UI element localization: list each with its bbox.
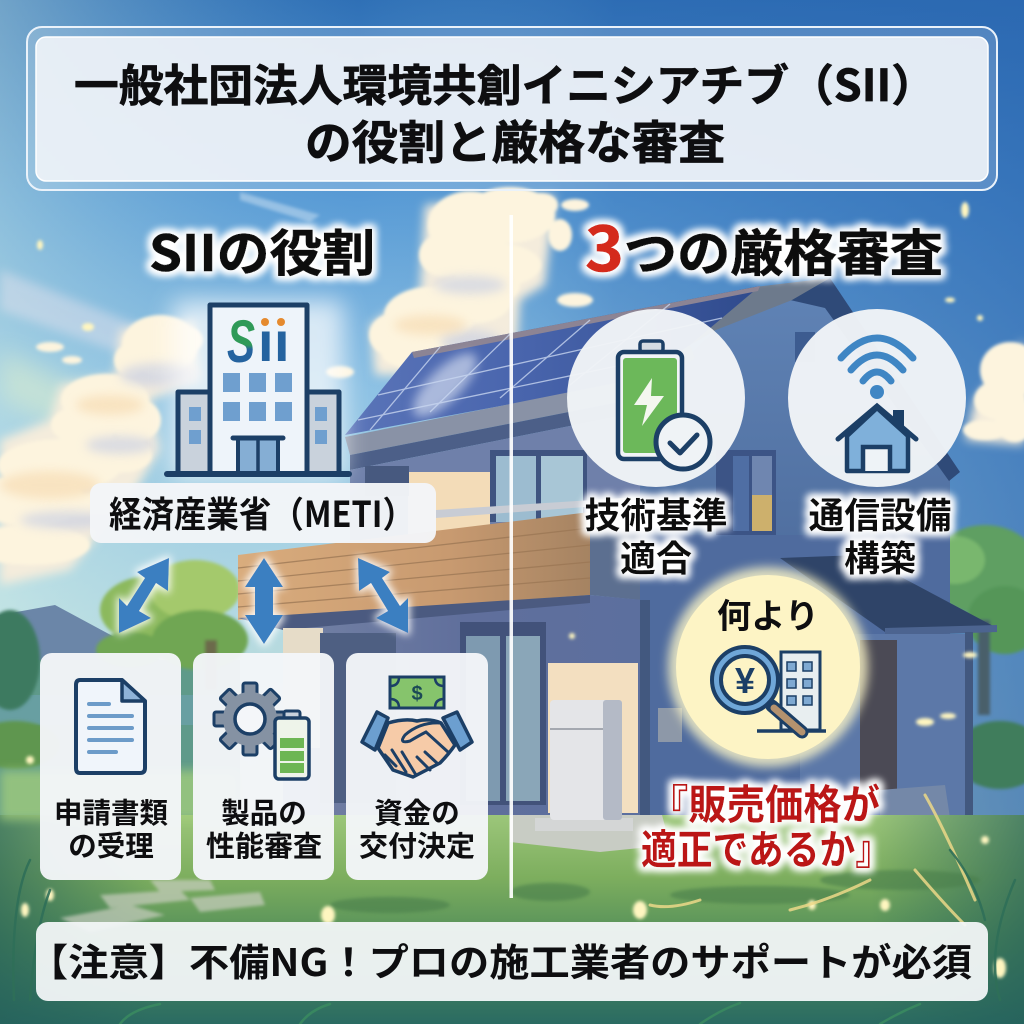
divider bbox=[510, 215, 513, 898]
footer warning panel bbox=[28, 922, 988, 1001]
red callout text: 適正であるか』 bbox=[641, 816, 891, 876]
label: 適合 bbox=[620, 530, 692, 582]
arrow: right bbox=[358, 558, 408, 633]
review item: technical standards bbox=[567, 309, 745, 582]
right trees bbox=[925, 525, 1024, 789]
arrow: left bbox=[119, 558, 169, 633]
label: 通信設備 bbox=[808, 487, 952, 539]
label: 申請書類 bbox=[54, 791, 168, 832]
right heading: 3つの厳格審査 bbox=[585, 199, 943, 289]
title panel bbox=[27, 27, 997, 190]
panel: document receipt bbox=[40, 653, 181, 880]
icon: banknote and handshake: $ bbox=[411, 683, 423, 705]
icon: battery with check bbox=[618, 341, 710, 469]
highlighted review item: sale price bbox=[668, 567, 868, 767]
red callout text: 『販売価格が bbox=[650, 771, 880, 831]
label: 何より bbox=[717, 589, 819, 638]
warning text: 【注意】不備NG！プロの施工業者のサポートが必須 bbox=[28, 932, 972, 987]
label bbox=[808, 487, 952, 582]
label bbox=[584, 487, 728, 582]
logo bbox=[227, 308, 290, 375]
arrows between METI and tasks bbox=[119, 558, 408, 644]
second floor bbox=[350, 412, 640, 540]
balcony wood bbox=[238, 512, 590, 620]
icon: banknote and handshake bbox=[362, 677, 472, 777]
soft cloud masses bbox=[0, 195, 1024, 585]
ground floor bbox=[283, 595, 643, 815]
panel: product review bbox=[193, 653, 334, 880]
arrow: center bbox=[245, 558, 283, 644]
grass bbox=[0, 815, 1024, 1024]
icon: gear and battery bbox=[214, 683, 309, 779]
clouds bbox=[0, 187, 1024, 565]
label: 製品の bbox=[221, 791, 307, 832]
left heading: SIIの役割 bbox=[149, 214, 375, 286]
METI panel bbox=[90, 483, 436, 543]
panel: funding decision: 交付決定 bbox=[359, 824, 475, 865]
icon: document bbox=[76, 680, 145, 773]
icon: magnifier with yen over building: ¥ bbox=[735, 660, 755, 701]
logo: S bbox=[227, 308, 255, 375]
icon: wifi house bbox=[838, 338, 916, 471]
solar roof bbox=[345, 286, 760, 435]
upper gable bbox=[640, 300, 950, 640]
storage battery unit bbox=[535, 818, 633, 831]
fireflies and light particles bbox=[21, 202, 1006, 978]
icon: magnifier with yen over building bbox=[712, 647, 826, 732]
label: 資金の bbox=[374, 791, 460, 832]
logo: ii bbox=[258, 310, 290, 373]
red callout text bbox=[641, 771, 891, 876]
label: 技術基準 bbox=[584, 487, 728, 539]
icon: SII building bbox=[167, 300, 349, 478]
title text line 1: 一般社団法人環境共創イニシアチブ（SII） bbox=[74, 50, 936, 114]
left hill and trees bbox=[0, 605, 180, 700]
METI label: 経済産業省（METI） bbox=[109, 486, 415, 538]
review item: communication equipment bbox=[788, 309, 966, 582]
title text line 2: の役割と厳格な審査 bbox=[305, 107, 725, 173]
right block bbox=[640, 535, 950, 815]
label: 構築 bbox=[844, 530, 916, 582]
panel: funding decision bbox=[346, 653, 488, 880]
panel: document receipt: の受理 bbox=[68, 824, 154, 865]
panel: product review: 性能審査 bbox=[206, 824, 322, 865]
